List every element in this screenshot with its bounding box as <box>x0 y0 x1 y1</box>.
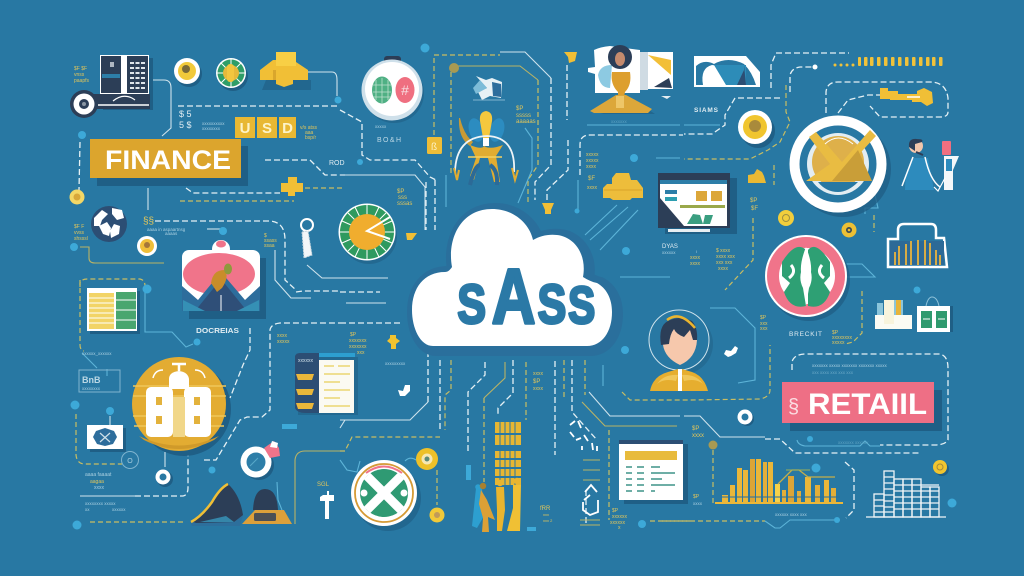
terminal caption: paapfs <box>74 78 90 84</box>
cloud with SASS title: S <box>457 274 486 335</box>
caption: lower monitor: xxxx <box>690 261 700 267</box>
label: BOSH: BO&H <box>377 137 401 144</box>
router icon <box>888 224 947 267</box>
skyline chart <box>866 471 946 517</box>
icon: rope charm <box>301 219 313 258</box>
caption: glyph: xxxx <box>533 386 544 392</box>
FINANCE banner: FINANCE <box>105 145 231 175</box>
icon: gold key <box>880 88 933 106</box>
marker: yellow pin top <box>564 52 577 63</box>
caption: lower right center: x <box>618 525 621 531</box>
caption: far chart low: xxxx <box>693 501 703 506</box>
label: SIAMS: SIAMS <box>694 107 719 114</box>
label: BRECKIT: BRECKIT <box>789 331 822 338</box>
caption: monitor: DYAS <box>662 244 678 250</box>
connector dots <box>70 44 956 531</box>
icon: green wheel <box>216 58 248 91</box>
icon: target clock: # <box>401 82 409 98</box>
label: SGL and figure: SGL <box>317 482 330 488</box>
blob <box>398 385 410 396</box>
caption: wheel: $P <box>397 189 404 195</box>
caption: glyph: xxxx <box>533 371 543 377</box>
person with device <box>902 139 959 191</box>
label: DOCREIAS: DOCREIAS <box>196 328 239 335</box>
caption: plus: $P <box>350 332 356 338</box>
icon: small dog <box>473 76 505 100</box>
glyph: squiggle: §§ <box>143 216 154 227</box>
caption: gold blocks: $F <box>588 176 595 182</box>
caption: lower center: xxx 2 <box>543 518 553 523</box>
panel: outlined box: xxxxxx_xxxxxx <box>82 351 112 356</box>
tile caption: aaa <box>305 130 314 136</box>
gold square: ß <box>431 142 437 153</box>
icons: books and bag <box>875 297 953 332</box>
glyph rings <box>570 421 598 515</box>
caption: gold blocks: xxxx <box>586 164 596 170</box>
caption: monitor right: $P <box>750 198 757 204</box>
tile caption: bsp/r <box>305 135 316 141</box>
white end dot <box>812 64 818 70</box>
icon: target clock <box>362 56 424 123</box>
icon: gold coin <box>70 190 84 204</box>
caption: lower monitor: xxxx <box>690 255 700 261</box>
panel: portrait on pedestal <box>588 45 673 114</box>
target emblem <box>790 116 891 217</box>
gold pill strip <box>834 57 942 66</box>
panel: pink finance card <box>182 240 266 319</box>
panel: spreadsheet <box>87 288 140 334</box>
caption: cloud left: xxxxxxxxx <box>385 361 406 366</box>
coin: yellow bottom right <box>933 460 949 476</box>
coin: yellow <box>778 210 794 226</box>
caption: wheel: sssas <box>397 201 412 207</box>
caption: lower monitor: ı <box>696 249 697 254</box>
USD tiles: D <box>282 120 293 137</box>
icon: gold plus <box>281 177 303 196</box>
caption: bee: aaaaas <box>516 119 536 125</box>
gold building medallion <box>132 357 231 456</box>
caption: glyph: $P <box>533 379 540 385</box>
label: below retail: xxxxxxx xxxxxx <box>838 440 869 445</box>
cloud with SASS title: S <box>538 274 566 335</box>
icon: small yellow plus <box>387 335 400 349</box>
caption: gold blocks: xxxxx <box>586 158 599 164</box>
caption: outline text above retail: xxxxxxx xxxxx xxxxxxx xxxxxxx xxxxx <box>812 363 888 368</box>
caption: doc: xxxxx <box>277 339 290 345</box>
caption: lower monitor: xxx xxx <box>716 260 733 266</box>
caption: lower right center: $P <box>612 508 618 514</box>
caption: plus: xxxxxxx <box>349 338 367 344</box>
caption: squiggle: aaaas <box>165 231 178 236</box>
caption: brain: xxxxx <box>832 340 845 346</box>
caption: lower right center: xxxxxx <box>612 514 628 520</box>
panel: outlined box: BnB <box>82 375 101 385</box>
caption: mid: $ <box>264 233 267 239</box>
icon: yellow coin <box>430 508 444 522</box>
icon: flower coin <box>174 58 202 87</box>
caption: bottom left: xx <box>85 507 90 512</box>
caption: avatar: $P <box>760 315 766 321</box>
label: dim: xxxxxxx <box>611 119 628 124</box>
bar chart <box>708 440 843 503</box>
caption: lower monitor: xxxx xxx <box>716 254 735 260</box>
panel: outlined box <box>79 351 120 392</box>
icon: bee figure <box>454 111 518 185</box>
caption: brain: xxxxxxxx <box>832 335 852 341</box>
panel: outlined box: xxxxxxxx <box>82 386 101 391</box>
caption: wheel: sss <box>398 195 407 201</box>
olive node <box>449 63 459 73</box>
icon: gold blocks <box>260 52 311 90</box>
icon: white card <box>87 425 126 452</box>
panel: app table card <box>619 440 688 504</box>
RETAIL banner: § <box>788 396 799 418</box>
panel: monitor <box>658 173 737 234</box>
icon: white ring <box>156 470 173 487</box>
caption: lower left: aagaa <box>90 479 104 485</box>
icon: globe <box>91 206 127 242</box>
caption: plus: xxx <box>357 350 365 356</box>
icon: flower right <box>738 110 775 148</box>
caption: gold blocks: xxxxx <box>586 152 598 158</box>
caption: lower center: fRR <box>540 506 550 512</box>
caption: outline text above retail: xxx xxxx xxx xxx xxx <box>812 370 854 375</box>
caption: squiggle: aaaa in aspaartnsg <box>147 227 185 232</box>
RETAIL banner <box>782 382 942 431</box>
terminal caption: $F $F <box>74 66 87 72</box>
label text: xxxxxxxx <box>202 126 221 131</box>
caption: gold blocks: xxxx <box>587 185 598 191</box>
caption: avatar: xxx <box>760 326 768 332</box>
ROD label: ROD <box>329 160 345 167</box>
gold wheel <box>338 204 397 264</box>
RETAIL banner: RETAIIL <box>808 388 927 421</box>
label: SGL and figure <box>317 482 334 519</box>
caption: lower left: aaaa faaaat <box>85 472 111 478</box>
USD tiles: S <box>262 120 272 137</box>
caption: globe: vvss <box>74 230 84 236</box>
caption: bottom left: xxxxxx <box>112 507 126 512</box>
caption: far chart left: xxxx <box>692 433 704 439</box>
caption: bottom left: xxxxxxxx xxxxx <box>85 501 116 506</box>
icon: dial with pink tag <box>240 441 280 480</box>
caption: outline text above retail <box>812 363 888 375</box>
pink brain emblem <box>765 235 850 321</box>
caption: chart: xxxxxx xxxx xxx <box>775 512 808 517</box>
label: BOSH <box>375 124 401 144</box>
caption: lower center: xxx <box>543 512 549 517</box>
FINANCE banner <box>90 139 248 186</box>
icon: gold hat <box>242 482 292 524</box>
glyph marks: $ 5 <box>179 109 192 119</box>
USD tiles: U <box>240 120 250 137</box>
caption: far chart low: $P <box>693 494 699 500</box>
gold square <box>427 137 442 154</box>
icon: yellow gear <box>416 448 438 470</box>
caption: mid: ssaa <box>264 243 275 249</box>
USD tiles <box>235 117 296 138</box>
icon: dark tent <box>190 484 243 526</box>
icon: small flower <box>137 236 157 256</box>
icon: white blob <box>724 346 738 357</box>
caption: plus: xxxxxxx <box>349 344 367 350</box>
caption: doc: xxxx <box>277 333 287 339</box>
caption: monitor right: $F <box>751 206 758 212</box>
caption: globe: shsssl <box>74 236 88 242</box>
avatar portrait <box>649 310 713 391</box>
terminal icon <box>70 55 153 118</box>
glyph marks: 5 $ <box>179 120 192 130</box>
panel: blue card <box>694 56 760 87</box>
icon: outlined circle <box>122 452 138 468</box>
caption: lower monitor: xxxx <box>718 266 728 272</box>
caption: bee: $P <box>516 106 523 112</box>
icon: people group <box>472 478 521 532</box>
caption: bee: sssss <box>516 113 531 119</box>
icon: outlined circle: O <box>127 458 133 465</box>
icon: gold blocks right <box>603 173 643 200</box>
caption: far chart left: $P <box>692 426 699 432</box>
label text: xxxxxxxxxx <box>202 121 224 126</box>
cloud with SASS title <box>412 209 615 348</box>
icon: gold small stack <box>748 169 766 183</box>
icon: gold grid <box>495 422 521 485</box>
tile caption: v/s atss <box>300 125 317 131</box>
cloud with SASS title: A <box>492 253 536 340</box>
caption: lower left: xxxx <box>94 485 104 491</box>
label: BOSH: xxxxx <box>375 124 387 129</box>
caption: lower right center: xxxxxx <box>610 520 626 526</box>
cloud with SASS title: S <box>568 276 595 334</box>
marker: gold tag <box>406 233 417 240</box>
panel: dark doc: xxxxxx <box>298 358 314 364</box>
caption: lower monitor <box>690 248 735 272</box>
terminal caption: vnss <box>74 72 85 78</box>
caption: monitor: xxxxxx <box>662 250 676 255</box>
caption: lower monitor: $ xxxx <box>716 248 730 254</box>
emblem: compass <box>351 460 421 531</box>
gear: yellow <box>842 222 856 238</box>
caption: brain: $P <box>832 330 838 336</box>
caption: mid: ssass <box>264 238 277 244</box>
caption: globe: $F F <box>74 224 84 230</box>
caption: avatar: xxx <box>760 321 768 327</box>
panel: dark doc <box>295 353 358 415</box>
icon: ring <box>738 410 754 426</box>
connector traces <box>76 52 948 528</box>
marker: yellow nail <box>542 203 554 214</box>
